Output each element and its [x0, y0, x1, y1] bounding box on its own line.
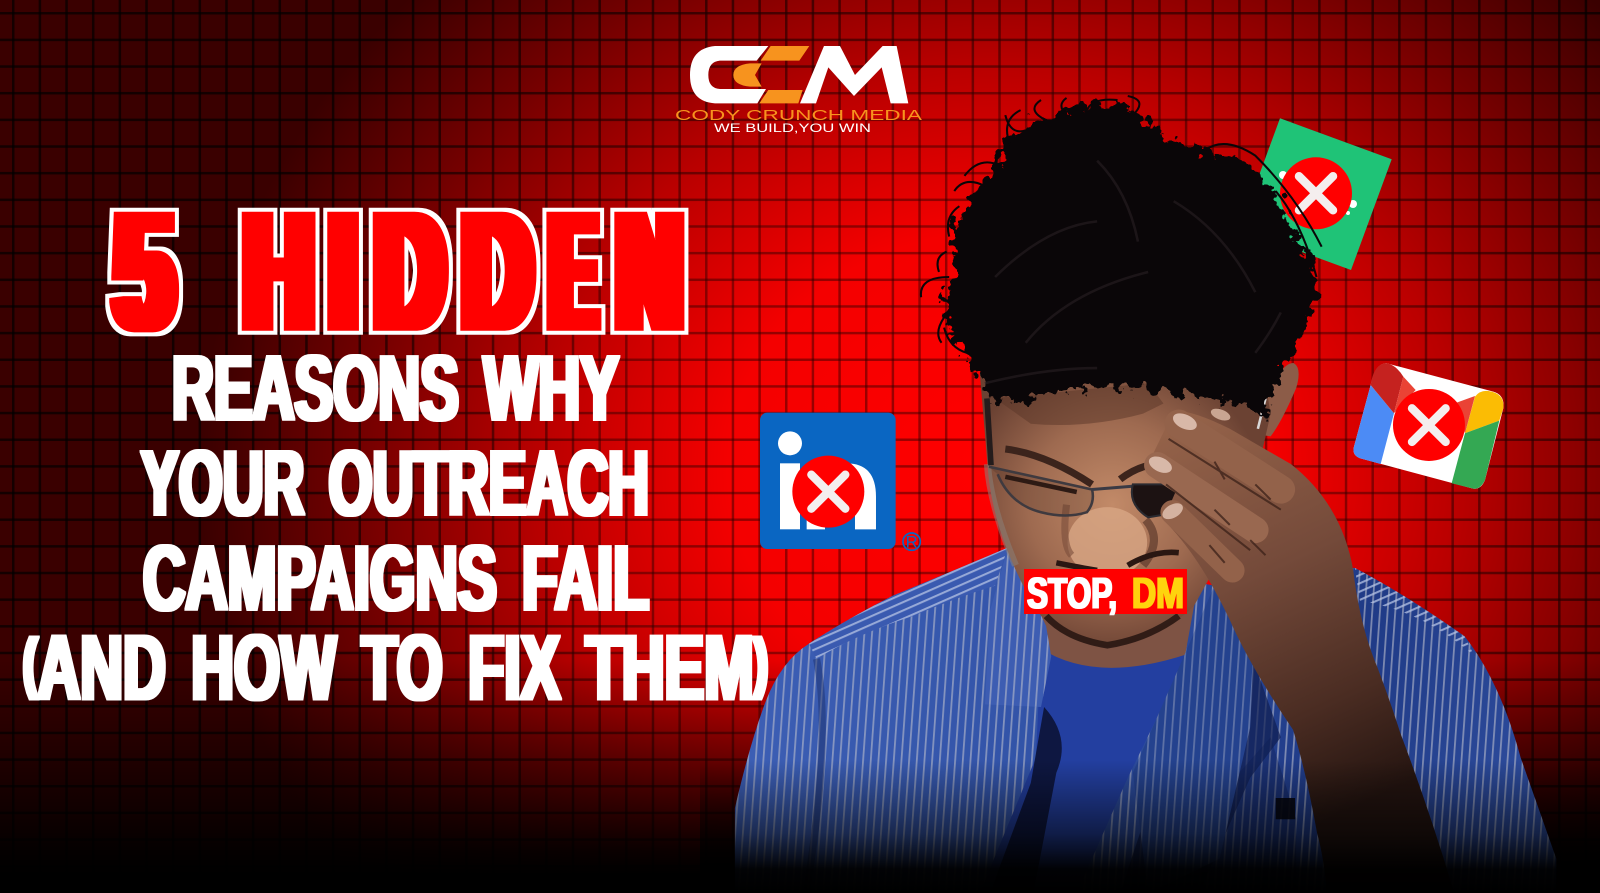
title: 5 HIDDEN: D — [463, 179, 532, 365]
mouth label: STOP, DM: DM — [1132, 569, 1184, 618]
logo mark: orange C — [733, 46, 809, 103]
title: 5 HIDDEN — [115, 179, 681, 365]
icon: linkedin tile with red cross — [760, 413, 920, 552]
finger creases — [1166, 439, 1281, 563]
logo mark: white C — [690, 46, 768, 103]
eyebrow — [1005, 449, 1092, 484]
man bottom fade to black — [700, 760, 1600, 893]
registered mark — [903, 533, 920, 552]
shirt — [735, 548, 1556, 893]
title: 5 HIDDEN: D — [375, 179, 444, 365]
face — [980, 353, 1271, 647]
title: 5 HIDDEN: H — [244, 179, 313, 365]
icon: green app tile with red cross — [1239, 118, 1392, 270]
neck — [1041, 606, 1194, 670]
icon: gmail envelope with red cross — [1353, 363, 1504, 489]
hand and forearm — [1146, 406, 1454, 893]
logo tagline: WE BUILD,YOU WIN — [714, 123, 871, 135]
title: 5 HIDDEN: 5 — [115, 179, 173, 365]
logo name: CODY CRUNCH MEDIA — [675, 108, 922, 124]
glasses — [987, 398, 1266, 517]
title line: (AND HOW TO FIX THEM): ( — [23, 624, 38, 700]
title: 5 HIDDEN: N — [617, 179, 681, 365]
title line: REASONS WHY: REASONS WHY — [172, 336, 619, 440]
inner blue t-shirt — [980, 649, 1188, 893]
mouth label: STOP, DM: STOP, — [1027, 569, 1117, 618]
shirt placket shadow — [990, 707, 1062, 893]
fingernails — [1170, 410, 1199, 433]
title line: (AND HOW TO FIX THEM): ) — [754, 624, 768, 700]
title line: (AND HOW TO FIX THEM) — [23, 616, 768, 720]
title: 5 HIDDEN: I — [330, 179, 356, 365]
logo mark: white M — [800, 46, 908, 103]
man holding his head — [735, 96, 1556, 893]
title line: (AND HOW TO FIX THEM): AND HOW TO FIX THEM — [37, 616, 754, 720]
shirt collar left — [985, 548, 1051, 707]
registered mark: R — [906, 533, 918, 552]
title line: CAMPAIGNS FAIL: CAMPAIGNS FAIL — [143, 526, 649, 630]
title: 5 HIDDEN: E — [551, 179, 595, 365]
ear — [1255, 363, 1299, 436]
title line: YOUR OUTREACH: YOUR OUTREACH — [141, 431, 649, 535]
hair — [921, 96, 1322, 416]
shirt collar right — [1133, 586, 1255, 893]
logo: Cody Crunch Media — [675, 46, 922, 135]
background fade to black — [0, 660, 1600, 893]
